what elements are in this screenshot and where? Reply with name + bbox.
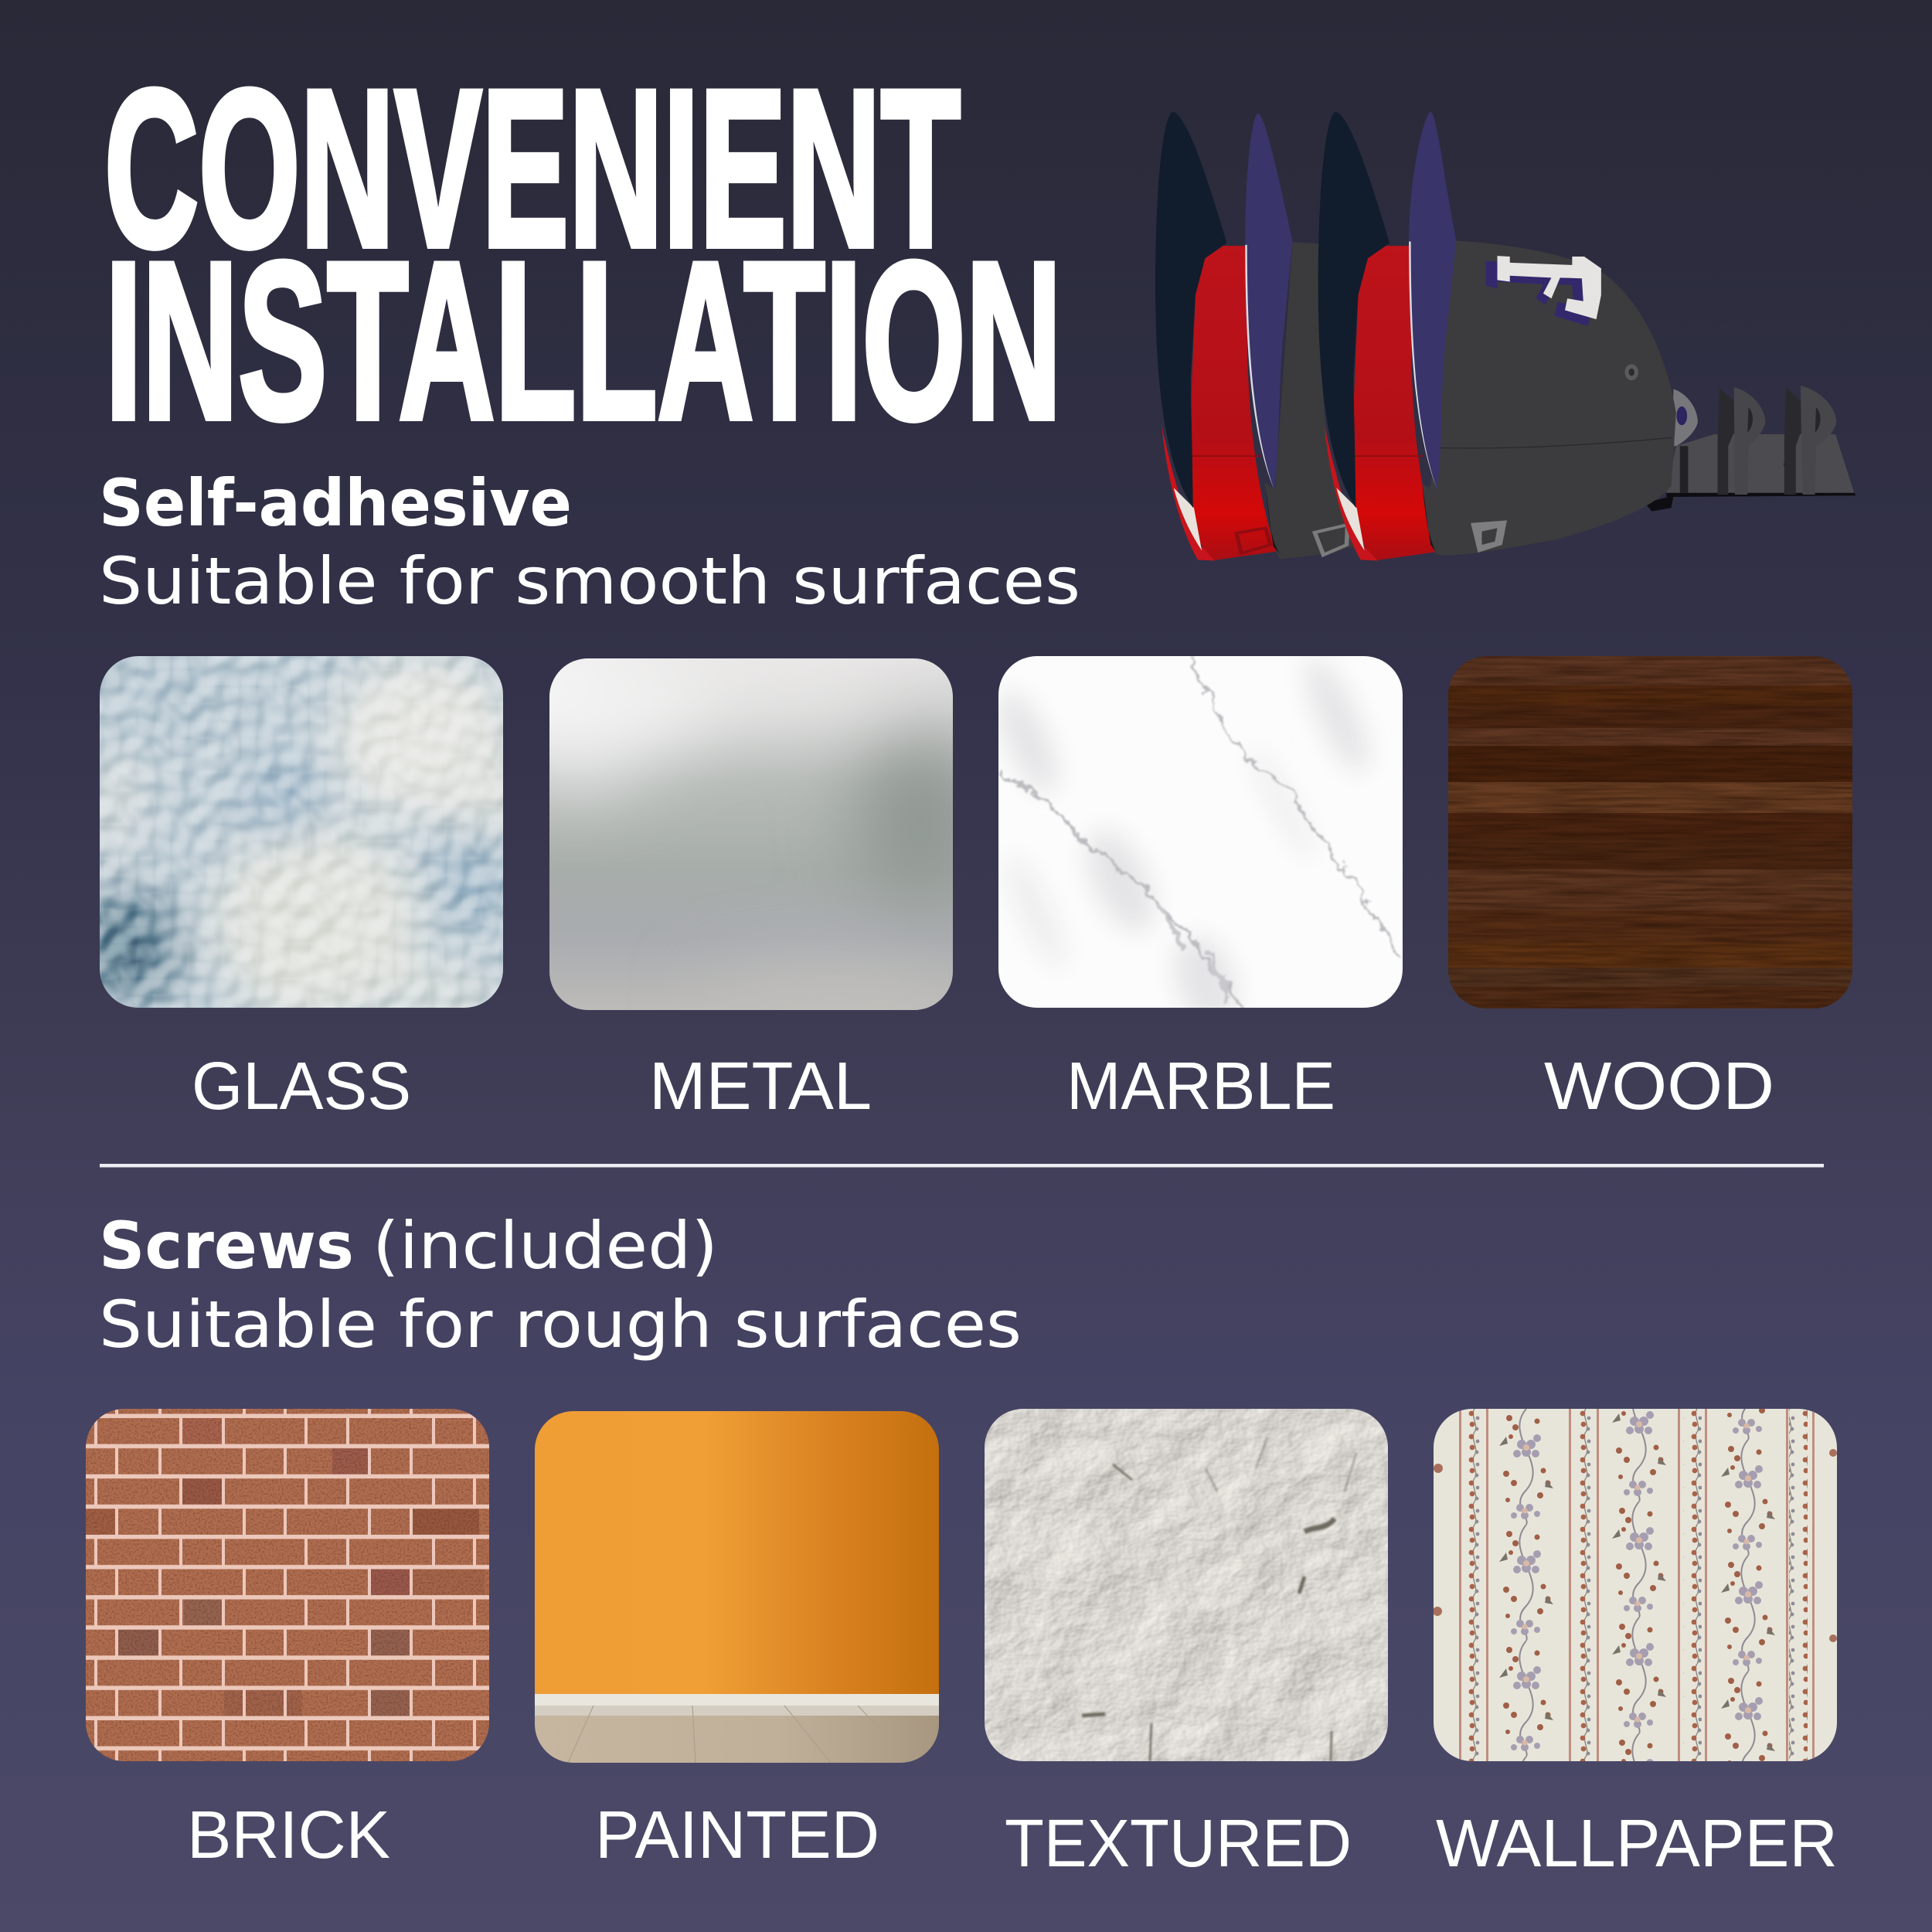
panel: glass xyxy=(100,656,503,1008)
panel: wood xyxy=(1448,656,1852,1009)
panel: wallpaper xyxy=(1433,1409,1837,1761)
section heading: self-adhesive: Self-adhesive xyxy=(99,465,572,541)
section subheading: smooth surfaces: Suitable for smooth surfaces xyxy=(99,543,1080,619)
title xyxy=(104,43,1062,466)
panel: textured plaster xyxy=(985,1409,1388,1761)
label: painted: PAINTED xyxy=(595,1798,879,1872)
cap 1: navy brim, red crown xyxy=(1155,112,1276,560)
label: textured: TEXTURED xyxy=(1005,1806,1352,1881)
label: wallpaper: WALLPAPER xyxy=(1436,1806,1838,1881)
title: INSTALLATION xyxy=(105,216,1062,466)
label: wood: WOOD xyxy=(1544,1049,1774,1124)
divider xyxy=(100,1164,1824,1167)
product photo: four caps on a wall rack xyxy=(1155,112,1855,560)
rack xyxy=(1645,386,1855,512)
title: CONVENIENT xyxy=(104,43,961,294)
panel: painted wall xyxy=(535,1411,939,1763)
label: metal: METAL xyxy=(649,1049,872,1124)
label: glass: GLASS xyxy=(192,1049,411,1124)
section heading: screws: Screws xyxy=(99,1208,354,1284)
cap 3: navy brim, red crown xyxy=(1318,112,1439,560)
section heading: screws: (included) xyxy=(372,1208,718,1284)
section subheading: rough surfaces: Suitable for rough surfaces xyxy=(99,1287,1022,1362)
label: brick: BRICK xyxy=(187,1798,390,1872)
cap 4: front grey cap with T logo xyxy=(1409,112,1676,556)
section heading: screws xyxy=(99,1208,718,1284)
panel: brick xyxy=(70,1409,489,1761)
panel: marble xyxy=(987,651,1403,1035)
label: marble: MARBLE xyxy=(1066,1049,1335,1124)
cap 2: purple brim, grey crown xyxy=(1245,114,1353,559)
panel: metal xyxy=(549,658,953,1010)
